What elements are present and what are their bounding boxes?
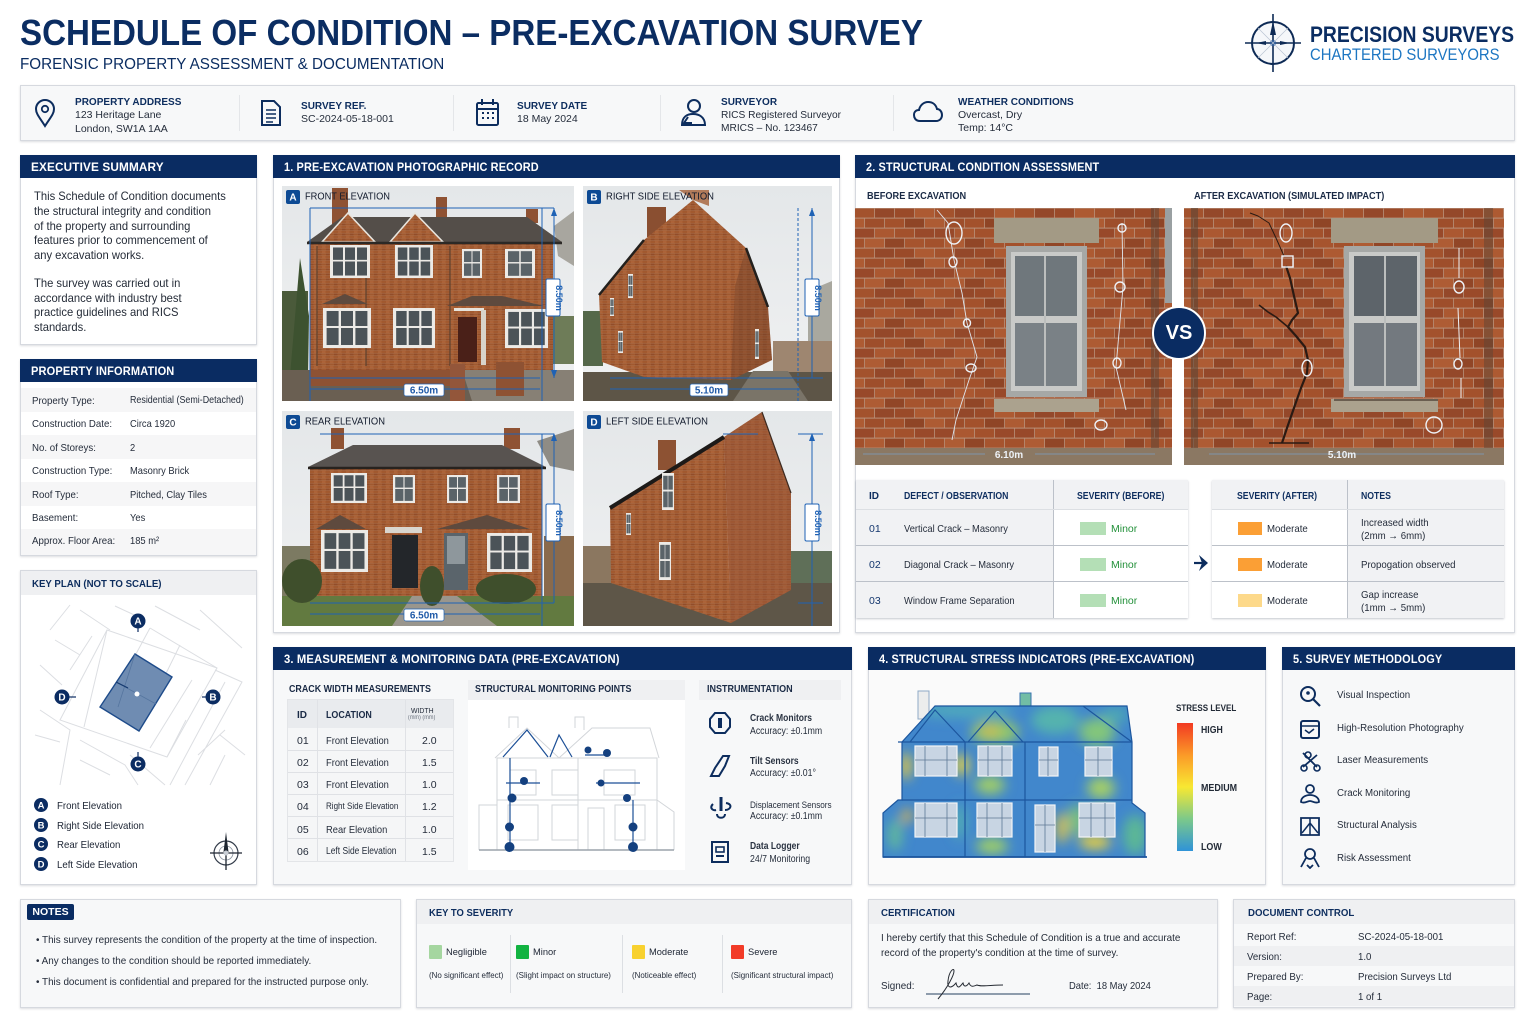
header row: SEVERITY (AFTER) — [1237, 491, 1317, 502]
crack monitors: Accuracy: ±0.1mm — [750, 726, 822, 737]
storeys — [32, 442, 135, 454]
photo label: RIGHT SIDE ELEVATION — [606, 190, 714, 202]
weather conditions: WEATHER CONDITIONS — [958, 96, 1074, 108]
crack width table: ID — [297, 710, 307, 721]
key plan legend: Left Side Elevation — [57, 859, 138, 871]
panel: key to severity — [416, 899, 852, 1008]
severe — [731, 945, 843, 981]
property type: Residential (Semi-Detached) — [130, 395, 244, 406]
minor — [516, 945, 616, 981]
row 03: Moderate — [1267, 595, 1308, 607]
panel: property information — [20, 359, 257, 556]
data logger: Data Logger — [750, 841, 800, 852]
certification text — [881, 931, 1201, 961]
item: Crack Monitoring — [1337, 788, 1410, 799]
colour ramp — [1177, 723, 1193, 851]
VS badge — [1152, 306, 1206, 360]
version — [1247, 949, 1507, 963]
key plan legend: C — [38, 840, 45, 850]
item: High-Resolution Photography — [1337, 723, 1464, 734]
row 03 — [1238, 589, 1425, 614]
dimension label: 5.10m — [1328, 450, 1356, 461]
storeys: No. of Storeys: — [32, 442, 96, 454]
icon: tilt sensors — [709, 754, 731, 778]
roof type: Roof Type: — [32, 489, 79, 501]
version: Version: — [1247, 951, 1282, 963]
icon: calendar — [476, 99, 499, 126]
marker C — [130, 752, 146, 772]
construction date — [32, 418, 175, 430]
heading: KEY TO SEVERITY — [429, 907, 513, 919]
monitoring points heading — [468, 680, 685, 700]
construction type: Masonry Brick — [130, 465, 189, 477]
row 03 — [869, 594, 1138, 607]
dimension label: width — [404, 384, 444, 396]
VS badge: VS — [1166, 322, 1192, 344]
monitoring points heading: STRUCTURAL MONITORING POINTS — [475, 684, 631, 695]
row 02 — [1238, 558, 1456, 571]
panel: key plan — [20, 570, 257, 885]
header row — [1237, 491, 1391, 502]
signature — [924, 967, 1034, 1001]
row 01 — [869, 522, 1138, 535]
header row: SEVERITY (BEFORE) — [1077, 491, 1164, 502]
heading — [855, 155, 1515, 178]
heading — [1282, 647, 1515, 670]
key plan legend: Rear Elevation — [57, 839, 120, 851]
severe: Severe — [748, 947, 777, 958]
survey basis text — [34, 276, 182, 334]
crack width table: 1.0 — [422, 824, 437, 836]
dimension label: width: 5.10m — [695, 386, 723, 396]
row 01 — [1238, 517, 1429, 542]
icon: cloud — [913, 101, 943, 122]
heading — [20, 359, 257, 382]
survey date: SURVEY DATE — [517, 100, 587, 112]
stress legend: MEDIUM — [1201, 783, 1237, 794]
summary text: of the property and surrounding — [34, 219, 190, 233]
dimension label: height: 8.50m — [813, 510, 823, 536]
header row: NOTES — [1361, 491, 1391, 502]
crack width table: 2.0 — [422, 735, 437, 747]
row 02: 02 — [869, 559, 881, 571]
heat map house — [882, 690, 1147, 858]
crack — [1250, 213, 1438, 443]
heading — [20, 155, 257, 178]
moderate: (Noticeable effect) — [632, 971, 696, 980]
dimension label: width: 6.50m — [410, 610, 438, 622]
survey date — [517, 100, 587, 125]
displacement sensors: Accuracy: ±0.1mm — [750, 811, 822, 822]
photo B: right side elevation — [583, 186, 832, 401]
heading: 3. MEASUREMENT & MONITORING DATA (PRE-EXCAVATION) — [284, 652, 620, 666]
surveyor details: RICS Registered Surveyor — [721, 109, 841, 121]
icon: photography — [1299, 718, 1321, 740]
floor area — [32, 535, 159, 547]
signed label: Signed: — [881, 981, 915, 992]
heading: 4. STRUCTURAL STRESS INDICATORS (PRE-EXCAVATION) — [879, 652, 1194, 666]
heading: CERTIFICATION — [881, 907, 955, 919]
crack width table: LOCATION — [326, 710, 372, 721]
heading: 5. SURVEY METHODOLOGY — [1293, 652, 1442, 666]
dimension label: 6.10m — [995, 450, 1023, 461]
note 3: • This document is confidential and prepared for the instructed purpose only. — [36, 977, 369, 988]
row 03: Window Frame Separation — [904, 595, 1015, 607]
photo label: D — [590, 418, 598, 428]
item: Laser Measurements — [1337, 755, 1428, 766]
property address: 123 Heritage Lane — [75, 109, 161, 121]
dimension label: height: 8.50m — [554, 285, 564, 311]
panel: structural condition assessment — [855, 155, 1515, 633]
severe: (Significant structural impact) — [731, 971, 833, 980]
heading — [273, 647, 852, 670]
version: 1.0 — [1358, 951, 1371, 963]
icon: compass logo — [1245, 14, 1301, 72]
crack width heading: CRACK WIDTH MEASUREMENTS — [289, 684, 431, 695]
crack monitors: Crack Monitors — [750, 713, 812, 724]
icon: visual inspection — [1299, 685, 1321, 707]
summary text: the structural integrity and condition — [34, 204, 211, 218]
icon: crack monitors — [708, 711, 732, 735]
marker C: C — [134, 760, 142, 770]
floor area: 185 m² — [130, 535, 159, 547]
heading — [869, 900, 1217, 924]
summary text: This Schedule of Condition documents — [34, 189, 226, 203]
summary text — [34, 189, 226, 262]
crack width table: 01 — [297, 735, 309, 747]
weather conditions: Temp: 14°C — [958, 122, 1013, 134]
photo label — [587, 190, 714, 204]
negligible: (No significant effect) — [429, 971, 503, 980]
property type: Property Type: — [32, 395, 95, 407]
key plan legend: Right Side Elevation — [57, 820, 144, 832]
row 01: (2mm → 6mm) — [1361, 530, 1425, 542]
heading — [868, 647, 1266, 670]
summary text: any excavation works. — [34, 248, 144, 262]
marker A: A — [134, 616, 142, 628]
row 03: Minor — [1111, 595, 1137, 607]
floor area: Approx. Floor Area: — [32, 535, 115, 547]
title: SCHEDULE OF CONDITION – PRE-EXCAVATION SURVEY — [20, 12, 923, 53]
displacement sensors — [750, 797, 840, 824]
survey basis text: The survey was carried out in — [34, 276, 180, 290]
legend title: STRESS LEVEL — [1176, 703, 1236, 714]
dimension label: height: 8.50m — [813, 285, 823, 311]
row 01: Moderate — [1267, 523, 1308, 535]
negligible — [429, 945, 509, 981]
row 02: Moderate — [1267, 559, 1308, 571]
survey reference: SC-2024-05-18-001 — [301, 113, 394, 125]
dimension label: width: 6.50m — [410, 386, 438, 396]
note 1: • This survey represents the condition of the property at the time of inspection. — [36, 935, 377, 946]
crack width table: 1.5 — [422, 846, 437, 858]
instrumentation heading: INSTRUMENTATION — [707, 684, 793, 695]
weather conditions — [958, 96, 1074, 134]
crack width table: 1.2 — [422, 801, 437, 813]
date: Date: 18 May 2024 — [1069, 981, 1151, 992]
property address: London, SW1A 1AA — [75, 123, 168, 135]
tilt sensors: Accuracy: ±0.01° — [750, 768, 816, 779]
crack width table: 05 — [297, 824, 309, 836]
crack width table: 02 — [297, 757, 309, 769]
photo label: FRONT ELEVATION — [305, 190, 390, 202]
panel: photographic record — [273, 155, 840, 633]
brand name: PRECISION SURVEYS — [1310, 22, 1514, 47]
prepared by — [1247, 969, 1507, 983]
displacement sensors: Displacement Sensors — [750, 799, 832, 810]
photo label — [286, 415, 385, 429]
header row: ID — [869, 491, 879, 502]
key plan legend: B — [38, 820, 45, 832]
panel: document control — [1233, 899, 1515, 1008]
crack monitors — [750, 711, 835, 738]
heading: 1. PRE-EXCAVATION PHOTOGRAPHIC RECORD — [284, 160, 539, 174]
panel: notes — [20, 899, 401, 1008]
summary text: features prior to commencement of — [34, 233, 208, 247]
icon: arrow — [1194, 555, 1208, 571]
table: severity after — [1212, 480, 1504, 618]
icon: data logger — [710, 840, 730, 864]
page — [1247, 989, 1507, 1003]
heading: PROPERTY INFORMATION — [31, 364, 174, 378]
moderate — [632, 945, 712, 981]
before label: BEFORE EXCAVATION — [867, 191, 966, 202]
roof type: Pitched, Clay Tiles — [130, 489, 207, 501]
crack width table: 04 — [297, 801, 309, 813]
construction type — [32, 465, 190, 477]
panel: survey methodology — [1282, 647, 1515, 885]
dimension label: width — [690, 384, 728, 396]
construction type: Construction Type: — [32, 465, 112, 477]
property address — [75, 96, 181, 135]
photo label: C — [289, 418, 297, 428]
tilt sensors — [750, 754, 835, 781]
property type — [32, 395, 244, 407]
prepared by: Precision Surveys Ltd — [1358, 971, 1451, 983]
brand tagline: CHARTERED SURVEYORS — [1310, 45, 1500, 64]
row 01: 01 — [869, 523, 881, 535]
certification text: record of the property's condition at the time of survey. — [881, 948, 1118, 959]
dimension label: height — [546, 279, 564, 316]
construction date: Circa 1920 — [130, 418, 175, 430]
basement — [32, 512, 145, 524]
minor: Minor — [533, 947, 556, 958]
key plan diagram — [35, 604, 246, 786]
crack width table: Front Elevation — [326, 757, 389, 769]
survey date: 18 May 2024 — [517, 113, 578, 125]
crack width table: Rear Elevation — [326, 824, 387, 836]
dimension label: height: 8.50m — [554, 510, 564, 536]
row 02: Minor — [1111, 559, 1137, 571]
property address: PROPERTY ADDRESS — [75, 96, 181, 108]
monitoring points diagram — [478, 716, 674, 852]
surveyor details: MRICS – No. 123467 — [721, 122, 818, 134]
subtitle: FORENSIC PROPERTY ASSESSMENT & DOCUMENTATION — [20, 56, 444, 73]
icon: surveyor — [681, 99, 706, 126]
report ref: SC-2024-05-18-001 — [1358, 931, 1443, 943]
report ref — [1247, 929, 1507, 943]
marker B: B — [209, 692, 217, 704]
survey basis text: standards. — [34, 320, 86, 334]
heading — [1234, 900, 1514, 924]
report ref: Report Ref: — [1247, 931, 1296, 943]
dimension label: width — [404, 609, 444, 622]
data logger: 24/7 Monitoring — [750, 854, 810, 865]
company logo — [1245, 14, 1514, 72]
crack width table — [288, 700, 453, 861]
property details strip — [20, 85, 1515, 141]
crack width table: 1.0 — [422, 779, 437, 791]
dimension label: height — [805, 504, 823, 541]
icon: displacement sensors — [709, 796, 733, 820]
crack width table: 1.5 — [422, 757, 437, 769]
photo: wall after excavation — [1184, 208, 1504, 465]
heading — [417, 900, 851, 924]
row 02: Diagonal Crack – Masonry — [904, 559, 1014, 571]
survey reference: SURVEY REF. — [301, 100, 366, 112]
row 03: Gap increase — [1361, 589, 1418, 601]
instrumentation heading — [699, 680, 841, 700]
header row: DEFECT / OBSERVATION — [904, 491, 1008, 502]
certification text: I hereby certify that this Schedule of Condition is a true and accurate — [881, 933, 1180, 944]
key plan legend: D — [38, 860, 45, 870]
crack width table: Right Side Elevation — [326, 801, 398, 812]
survey reference — [301, 100, 394, 125]
row 01: Minor — [1111, 523, 1137, 535]
stress legend: HIGH — [1201, 725, 1223, 736]
row 02 — [869, 558, 1138, 571]
after label: AFTER EXCAVATION (SIMULATED IMPACT) — [1194, 191, 1384, 202]
key plan legend: Front Elevation — [57, 800, 122, 812]
panel: executive summary — [20, 155, 257, 345]
panel: measurement and monitoring data — [273, 647, 852, 885]
icon: laser measurements — [1299, 750, 1321, 772]
heading — [21, 571, 256, 595]
marker D — [54, 690, 76, 704]
icon: crack monitoring — [1299, 783, 1321, 805]
item: Visual Inspection — [1337, 690, 1410, 701]
negligible: Negligible — [446, 947, 487, 958]
tilt sensors: Tilt Sensors — [750, 756, 799, 767]
photo A: front elevation — [282, 186, 574, 401]
page: 1 of 1 — [1358, 991, 1382, 1003]
crack width table: Front Elevation — [326, 779, 389, 791]
row 01: Vertical Crack – Masonry — [904, 523, 1008, 535]
crack width table: (mm) (mm) — [408, 715, 435, 721]
icon: north compass — [210, 832, 242, 870]
icon: location pin — [35, 99, 55, 128]
item: Structural Analysis — [1337, 820, 1417, 831]
moderate: Moderate — [649, 947, 688, 958]
minor: (Slight impact on structure) — [516, 971, 611, 980]
stress legend — [1172, 699, 1248, 859]
row 02: Propogation observed — [1361, 559, 1456, 571]
photo label: A — [289, 192, 297, 204]
heading: EXECUTIVE SUMMARY — [31, 160, 164, 174]
surveyor details: SURVEYOR — [721, 96, 777, 108]
stress legend: LOW — [1201, 842, 1222, 853]
crack width table: Front Elevation — [326, 735, 389, 747]
marker D: D — [58, 692, 66, 704]
weather conditions: Overcast, Dry — [958, 109, 1022, 121]
dimension label: height — [805, 279, 823, 316]
surveyor details — [721, 96, 841, 134]
crack width table: 06 — [297, 846, 309, 858]
crack width table: WIDTH — [411, 706, 434, 715]
icon: document — [261, 100, 281, 126]
row 03: (1mm → 5mm) — [1361, 602, 1425, 614]
crack width table: Left Side Elevation — [326, 846, 396, 857]
panel: certification — [868, 899, 1218, 1008]
photo label: LEFT SIDE ELEVATION — [606, 416, 708, 428]
heading — [273, 155, 840, 178]
basement: Basement: — [32, 512, 78, 524]
photo label — [587, 415, 708, 429]
header row — [869, 491, 1164, 502]
badge: NOTES — [32, 906, 69, 918]
heading: KEY PLAN (NOT TO SCALE) — [32, 578, 162, 590]
key plan legend: A — [38, 800, 45, 812]
photo label — [286, 190, 390, 204]
construction date: Construction Date: — [32, 418, 112, 430]
row 01: Increased width — [1361, 517, 1429, 529]
photo label: B — [590, 192, 598, 204]
panel: structural stress indicators — [868, 647, 1266, 885]
photo label: REAR ELEVATION — [305, 416, 385, 428]
row 03: 03 — [869, 595, 881, 607]
page: Page: — [1247, 991, 1272, 1003]
basement: Yes — [130, 512, 145, 524]
survey basis text: accordance with industry best — [34, 291, 182, 305]
roof type — [32, 489, 207, 501]
key plan legend — [34, 798, 144, 871]
note 2: • Any changes to the condition should be reported immediately. — [36, 956, 311, 967]
crack width table: 03 — [297, 779, 309, 791]
heading: 2. STRUCTURAL CONDITION ASSESSMENT — [866, 160, 1099, 174]
survey basis text: practice guidelines and RICS — [34, 305, 179, 319]
icon: structural analysis — [1299, 815, 1321, 837]
prepared by: Prepared By: — [1247, 971, 1303, 983]
data logger — [750, 839, 835, 866]
marker B — [202, 690, 220, 704]
storeys: 2 — [130, 442, 135, 454]
heading: DOCUMENT CONTROL — [1248, 907, 1354, 919]
badge — [27, 904, 74, 920]
photo D: left side elevation — [583, 411, 832, 626]
photo C: rear elevation — [282, 411, 574, 626]
table: severity before — [856, 480, 1188, 618]
item: Risk Assessment — [1337, 853, 1411, 864]
dimension label: height — [546, 504, 564, 541]
photo: wall before excavation — [855, 208, 1172, 465]
icon: risk assessment — [1299, 847, 1321, 869]
marker A — [130, 614, 146, 632]
